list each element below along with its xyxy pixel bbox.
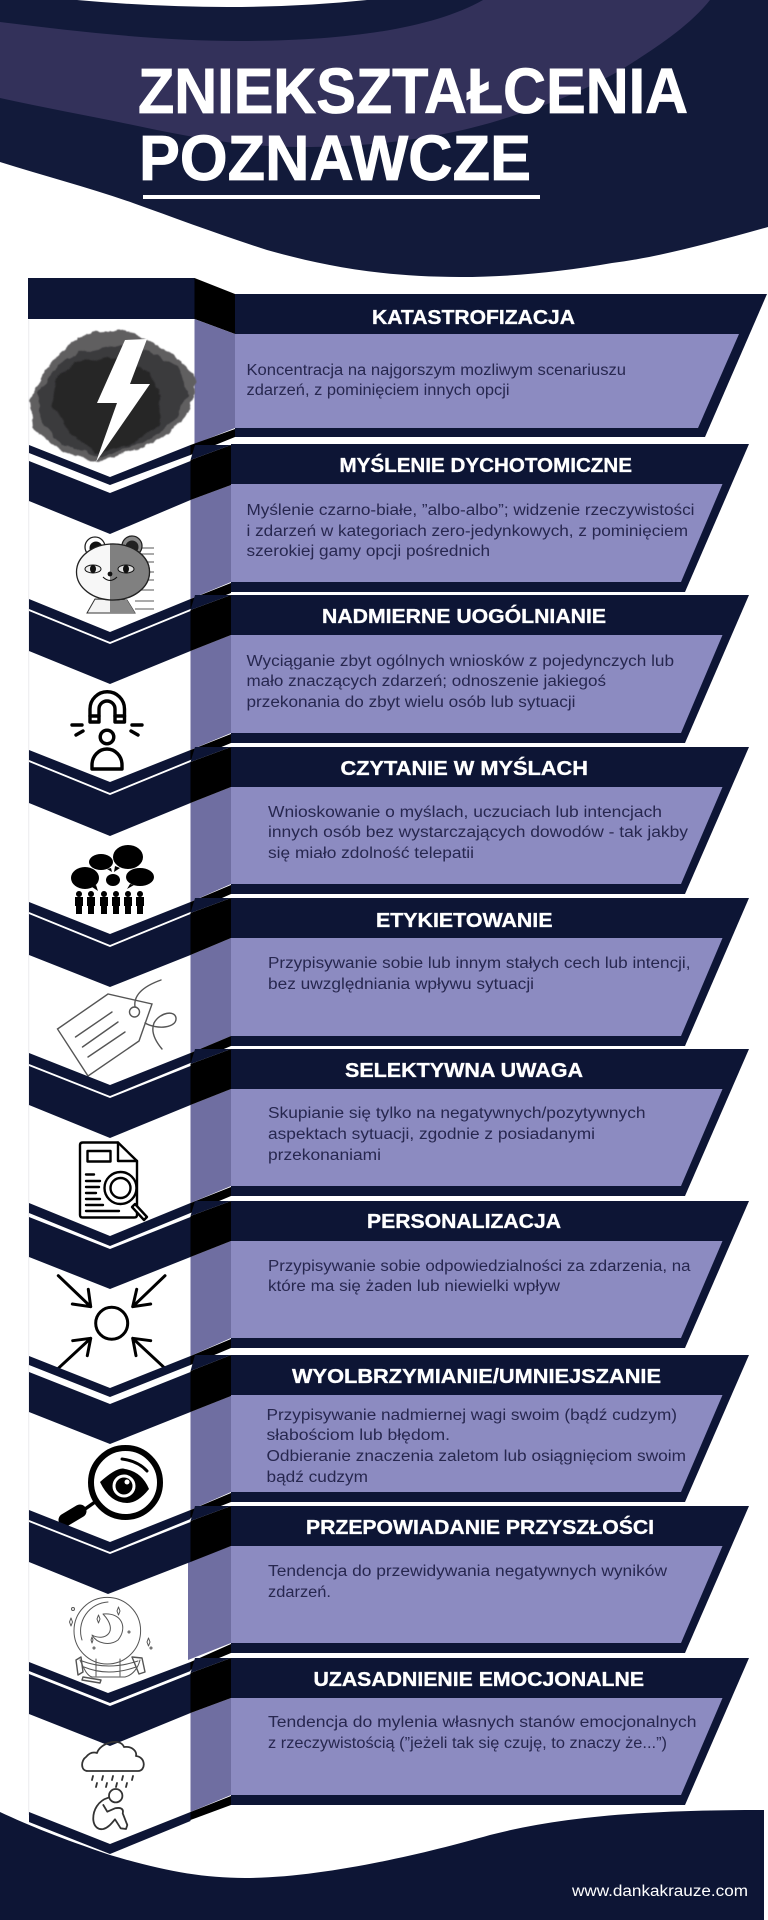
description: słabościom lub błędom. [266,1427,450,1444]
heading: WYOLBRZYMIANIE/UMNIEJSZANIE [292,1365,661,1388]
description: aspektach sytuacji, zgodnie z posiadanymi [268,1126,595,1143]
heading: PERSONALIZACJA [367,1210,561,1233]
description: Tendencja do przewidywania negatywnych wyników [268,1563,668,1580]
description [268,1714,696,1752]
icon: half white half grey cat [76,536,154,613]
website url: www.dankakrauze.com [571,1883,748,1900]
icon: price tag [58,980,176,1076]
description: zdarzeń, z pominięciem innych opcji [246,382,510,399]
description: Tendencja do mylenia własnych stanów emocjonalnych [268,1714,696,1731]
panel: czytanie w myślach [29,734,749,914]
heading: UZASADNIENIE EMOCJONALNE [314,1668,644,1691]
panel: etykietowanie [29,885,749,1076]
footer wave [0,1810,764,1920]
description: się miało zdolność telepatii [268,845,474,862]
description [268,1258,691,1295]
description: innych osób bez wystarczających dowodów - tak jakby [268,824,688,841]
panel: katastrofizacja [28,278,767,462]
description: Odbieranie znaczenia zaletom lub osiągnięciom swoim [266,1448,686,1465]
description: Skupianie się tylko na negatywnych/pozytywnych [268,1105,646,1122]
icon: crystal ball [70,1597,152,1683]
title: POZNAWCZE [139,122,531,194]
panel: uzasadnienie emocjonalne [29,1644,749,1854]
heading: ETYKIETOWANIE [376,909,552,932]
description: Wnioskowanie o myślach, uczuciach lub intencjach [268,804,662,821]
heading: PRZEPOWIADANIE PRZYSZŁOŚCI [306,1515,654,1539]
description: przekonaniami [268,1147,381,1164]
description [268,955,690,993]
panel: wyolbrzymianie/umniejszanie [29,1339,749,1520]
heading: MYŚLENIE DYCHOTOMICZNE [340,453,632,477]
icon: storm cloud with lightning [30,330,196,462]
description: Myślenie czarno-białe, ”albo-albo”; widzenie rzeczywistości [246,502,694,519]
icon: group with speech bubbles [71,845,154,914]
description [246,653,674,711]
panel: myślenie dychotomiczne [29,429,749,613]
icon: arrows pointing at circle [58,1276,165,1368]
description: Wyciąganie zbyt ogólnych wniosków z pojedynczych lub [246,653,674,670]
icon: document with magnifier [80,1142,147,1220]
description: które ma się żaden lub niewielki wpływ [268,1278,561,1295]
header banner [0,0,768,277]
description: Przypisywanie nadmiernej wagi swoim (bądź cudzym) [266,1407,677,1424]
description: i zdarzeń w kategoriach zero-jedynkowych, z pominięciem [246,523,688,540]
description: szerokiej gamy opcji pośrednich [246,543,490,560]
panel: personalizacja [29,1187,749,1368]
heading: CZYTANIE W MYŚLACH [340,756,588,780]
description: Przypisywanie sobie odpowiedzialności za zdarzenia, na [268,1258,691,1275]
description [268,1105,646,1164]
description: przekonania do zbyt wielu osób lub sytuacji [246,694,576,711]
heading: KATASTROFIZACJA [372,306,575,329]
panel: przepowiadanie przyszłości [29,1493,749,1683]
icon: magnet and person [72,692,142,769]
description: z rzeczywistością (”jeżeli tak się czuję, to znaczy że...”) [268,1735,667,1752]
title: ZNIEKSZTAŁCENIA [138,55,688,127]
title [138,55,688,199]
heading: NADMIERNE UOGÓLNIANIE [322,604,606,628]
description: Przypisywanie sobie lub innym stałych cech lub intencji, [268,955,690,972]
heading: SELEKTYWNA UWAGA [345,1059,583,1082]
description [246,502,694,560]
description: Koncentracja na najgorszym mozliwym scenariuszu [246,362,626,379]
description [266,1407,686,1486]
description [268,1563,668,1601]
panel: nadmierne uogólnianie [29,583,749,769]
description: bądź cudzym [266,1469,368,1486]
icon: rain cloud over sad person [82,1742,144,1829]
description: bez uwzględniania wpływu sytuacji [268,976,534,993]
description: mało znaczących zdarzeń; odnoszenie jakiegoś [246,673,606,690]
description: zdarzeń. [268,1584,331,1601]
description [268,804,688,862]
description [246,362,626,399]
panel: selektywna uwaga [29,1036,749,1220]
icon: eye in magnifying glass [65,1448,160,1520]
